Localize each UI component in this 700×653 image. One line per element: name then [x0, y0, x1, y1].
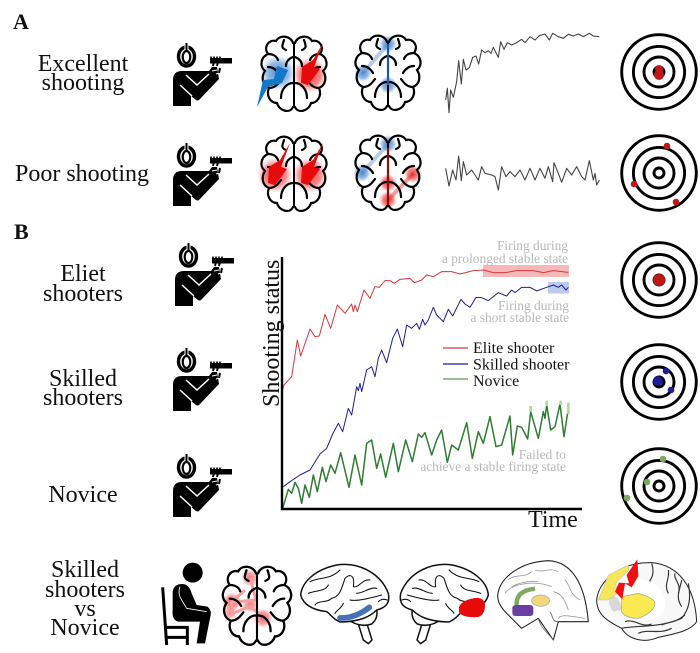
curve: skilled shooter — [283, 285, 568, 487]
row label: novice: Novice — [48, 482, 118, 508]
row label: eliet shooters: shooters — [43, 281, 123, 307]
line chart: excellent stability — [446, 33, 599, 113]
brain: skilled vs novice connectivity — [222, 567, 291, 645]
panel label A: A — [13, 9, 29, 34]
panel label B: B — [14, 219, 29, 244]
annotation: short stable: a short stable state — [470, 310, 569, 325]
chart: shooting status over time — [259, 238, 582, 533]
row label: skilled shooters vs novice: shooters — [45, 577, 125, 603]
curve: novice — [283, 404, 568, 508]
y axis label: Shooting status — [259, 260, 285, 407]
line chart: poor stability — [446, 156, 599, 190]
row label: skilled shooters vs novice: Skilled — [51, 557, 119, 583]
icon: shooter poor — [173, 143, 232, 206]
annotation: short stable: Firing during — [498, 298, 569, 313]
brain: medial section with limbic regions — [498, 561, 588, 640]
legend — [443, 340, 570, 390]
annotation: failed: achieve a stable firing state — [420, 459, 566, 474]
row label: skilled shooters: Skilled — [49, 366, 117, 392]
brain: occipital region highlighted — [400, 564, 488, 644]
annotation: failed: Failed to — [519, 447, 566, 462]
icon: shooter skilled — [173, 348, 232, 411]
row label: eliet shooters: Eliet — [60, 261, 106, 287]
curve: elite shooter — [282, 270, 568, 393]
stable band: elite — [483, 265, 569, 277]
row label: skilled shooters vs novice: Novice — [50, 615, 120, 641]
target: poor grouping — [622, 136, 696, 210]
axes — [282, 257, 582, 509]
brain: temporal region highlighted — [301, 564, 389, 644]
legend: Elite shooter — [473, 340, 555, 357]
legend: Novice — [473, 373, 519, 390]
icon: shooter elite — [175, 243, 234, 306]
brain: excellent connectivity — [354, 35, 421, 110]
target: excellent grouping — [622, 35, 696, 109]
brain: poor activation — [257, 137, 328, 211]
annotation: prolonged stable: a prolonged stable state — [442, 251, 568, 266]
x axis label: Time — [528, 507, 578, 533]
icon: shooter excellent — [173, 43, 232, 106]
annotation: prolonged stable: Firing during — [497, 238, 568, 253]
target: skilled grouping — [622, 345, 696, 419]
legend: Skilled shooter — [473, 356, 570, 374]
target: novice grouping — [622, 449, 696, 523]
curves group — [282, 270, 568, 508]
brain: poor connectivity — [353, 135, 422, 210]
row label: skilled shooters vs novice: vs — [74, 596, 96, 622]
icon: shooter novice — [173, 454, 232, 517]
row label: skilled shooters: shooters — [43, 385, 123, 411]
row label: excellent shooting: shooting — [42, 70, 124, 96]
target: elite grouping — [622, 243, 696, 317]
brain: excellent activation — [257, 37, 328, 111]
stable band: skilled — [548, 282, 569, 294]
icon: seated person — [163, 563, 211, 645]
row label: poor shooting: Poor shooting — [15, 161, 149, 187]
brain: 3D cutaway with bolt — [597, 559, 697, 640]
row label: excellent shooting: Excellent — [38, 51, 129, 77]
